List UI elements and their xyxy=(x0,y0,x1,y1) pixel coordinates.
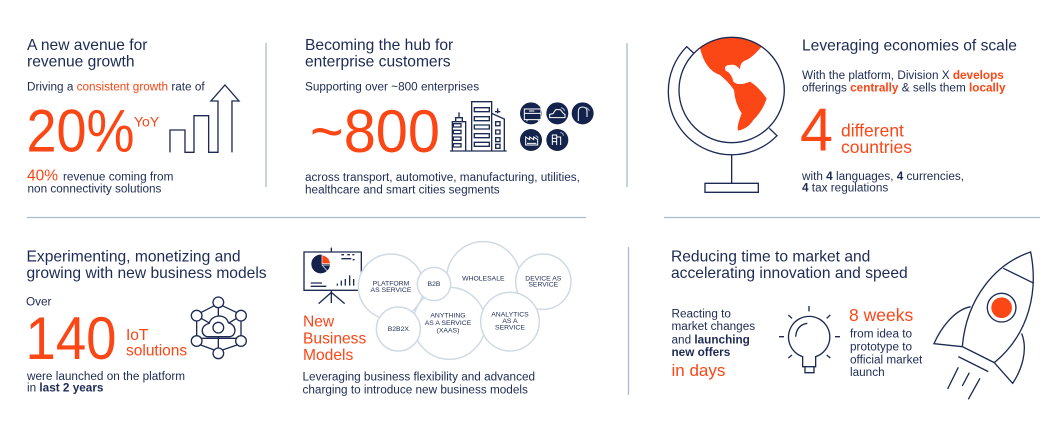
icon: rising bars and arrow xyxy=(170,85,239,152)
stat: 4: 4 xyxy=(800,97,833,164)
label: different countries: countries xyxy=(841,137,912,157)
text: reacting to market changes: market changes xyxy=(672,320,755,333)
icons: industry segments xyxy=(520,102,594,151)
text: leveraging flexibility: Leveraging business flexibility and advanced xyxy=(302,371,535,384)
text: reacting to market changes xyxy=(672,307,755,359)
bubble: analytics as a service: SERVICE xyxy=(495,324,525,331)
text: idea to launch: from idea to xyxy=(850,328,913,341)
heading: time to market xyxy=(671,249,908,282)
bubble: B2B2X xyxy=(376,307,420,351)
label: IoT solutions: IoT xyxy=(126,327,149,344)
icon: presentation board xyxy=(304,248,361,304)
bubble: anything as a service: AS A SERVICE xyxy=(425,320,472,327)
bubble: platform as service: PLATFORM xyxy=(373,281,410,288)
text: idea to launch: official market xyxy=(850,353,923,366)
panel: business model bubbles xyxy=(302,242,571,396)
panel: revenue growth xyxy=(26,37,239,196)
panel: new business models xyxy=(26,249,267,394)
text: segments xyxy=(305,171,580,197)
text: segments: across transport, automotive, manufacturing, utilities, xyxy=(305,171,580,184)
bubble: anything as a service xyxy=(413,287,485,359)
heading: revenue growth: A new avenue for xyxy=(27,37,148,54)
panel: time to market xyxy=(671,249,1034,399)
label: IoT solutions: solutions xyxy=(126,343,187,360)
text: reacting to market changes: and launching xyxy=(672,333,750,346)
label: New Business Models: Models xyxy=(303,347,353,364)
text: develops centrally: offerings centrally & sells them locally xyxy=(802,82,1006,95)
text: develops centrally: With the platform, Division X develops xyxy=(802,69,1004,82)
text: launched on the platform xyxy=(26,370,185,394)
text: idea to launch: launch xyxy=(850,366,885,379)
text: non connectivity revenue: 40% xyxy=(27,168,58,184)
text: consistent growth rate: Driving a consistent growth rate of xyxy=(27,81,205,94)
chart: bubble cluster xyxy=(358,242,571,359)
text: languages, currencies, tax: 4 tax regulations xyxy=(802,182,888,194)
icon: light bulb xyxy=(779,306,840,373)
bubble: wholesale: WHOLESALE xyxy=(462,276,505,283)
icon: cloud network xyxy=(191,297,246,359)
text: launched on the platform: in last 2 years xyxy=(27,382,104,394)
bubble: platform as service: AS SERVICE xyxy=(371,287,412,294)
text: reacting to market changes: new offers xyxy=(672,346,731,359)
heading: time to market: accelerating innovation and speed xyxy=(671,265,908,282)
heading: economies of scale: Leveraging economies of scale xyxy=(802,38,1017,55)
text: idea to launch xyxy=(850,328,923,379)
bubble: B2B2X: B2B2X xyxy=(388,326,409,333)
text: segments: healthcare and smart cities segments xyxy=(305,184,500,197)
heading: enterprise customers: Becoming the hub for xyxy=(305,37,453,54)
bubble: analytics as a service: ANALYTICS xyxy=(491,312,529,319)
bubble: platform as service xyxy=(358,254,424,319)
bubble: anything as a service: ANYTHING xyxy=(430,313,466,320)
icon: city buildings xyxy=(450,102,507,151)
heading: enterprise customers: enterprise customers xyxy=(305,54,451,71)
bubble: B2B: B2B xyxy=(428,281,441,288)
text: non connectivity revenue xyxy=(27,168,174,196)
label: YoY: YoY xyxy=(134,114,160,130)
label: different countries: different xyxy=(841,121,904,141)
heading: revenue growth xyxy=(27,37,148,71)
bubble: analytics as a service: AS A xyxy=(502,318,518,325)
panel: economies of scale xyxy=(668,37,1017,194)
heading: revenue growth: revenue growth xyxy=(27,54,134,71)
bubble: device as service: DEVICE AS xyxy=(525,275,562,282)
text: non connectivity revenue: revenue coming from xyxy=(63,170,174,184)
text: languages, currencies, tax xyxy=(801,170,964,194)
bubble: anything as a service: (XAAS) xyxy=(437,327,459,334)
text: leveraging flexibility xyxy=(302,371,535,396)
stat: 20 percent: 20% xyxy=(26,98,134,164)
bubble: analytics as a service xyxy=(481,292,539,351)
label: New Business Models: Business xyxy=(303,330,366,347)
icon: globe xyxy=(668,37,784,192)
bubble: B2B xyxy=(417,267,451,301)
stat: about 800: ~800 xyxy=(310,98,440,165)
text: non connectivity revenue: non connectivity solutions xyxy=(28,182,162,196)
label: New Business Models: New xyxy=(303,314,335,331)
text: develops centrally xyxy=(802,69,1006,95)
heading: enterprise customers xyxy=(305,37,453,71)
stat: 8 weeks: 8 weeks xyxy=(849,305,913,325)
text: over: Over xyxy=(26,296,52,309)
stat: 140: 140 xyxy=(26,305,116,372)
label: in days: in days xyxy=(672,361,725,380)
text: leveraging flexibility: charging to introduce new business models xyxy=(302,383,528,396)
label: New Business Models xyxy=(303,314,366,364)
heading: business models: Experimenting, monetizing and xyxy=(26,249,241,266)
panel: enterprise customers xyxy=(305,37,594,197)
heading: time to market: Reducing time to market and xyxy=(671,249,870,266)
text: supporting enterprises: Supporting over ~800 enterprises xyxy=(305,81,479,94)
text: idea to launch: prototype to xyxy=(850,340,913,353)
text: reacting to market changes: Reacting to xyxy=(672,307,731,320)
heading: business models xyxy=(26,249,267,282)
heading: business models: growing with new business models xyxy=(26,265,267,282)
label: IoT solutions xyxy=(126,327,187,360)
icon: rocket xyxy=(934,252,1034,399)
bubble: device as service: SERVICE xyxy=(528,282,559,289)
bubble: device as service xyxy=(516,254,571,309)
text: launched on the platform: were launched on the platform xyxy=(26,370,185,383)
label: different countries xyxy=(841,121,912,157)
text: languages, currencies, tax: with 4 languages, 4 currencies, xyxy=(801,170,964,183)
bubble: wholesale xyxy=(447,242,520,315)
